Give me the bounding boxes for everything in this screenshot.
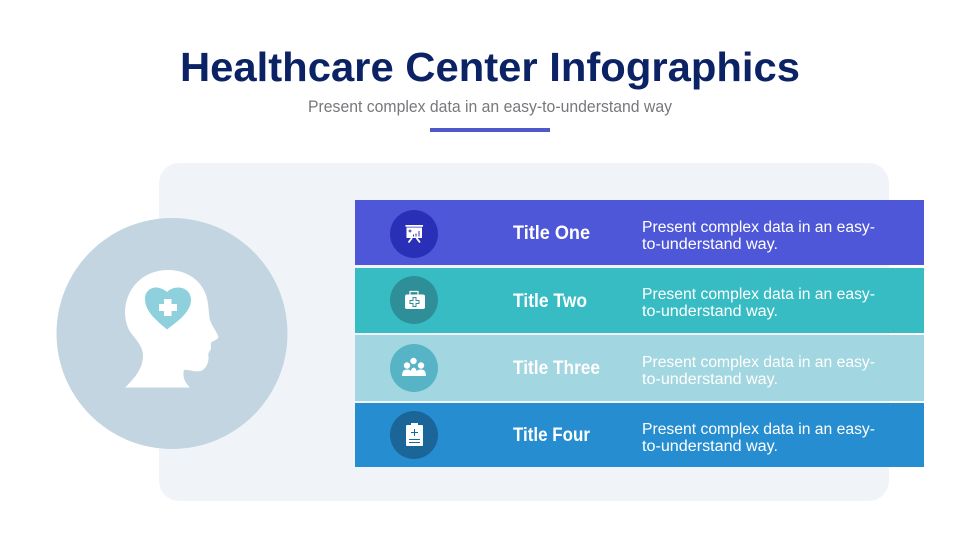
- row 4 description: to-understand way.: [642, 438, 778, 455]
- row 4 band: [355, 403, 924, 467]
- row 3 band: [355, 335, 924, 401]
- row 1 band: [355, 200, 924, 265]
- row 2 description: to-understand way.: [642, 303, 778, 320]
- icon: heart: [145, 287, 191, 330]
- row 3 description: to-understand way.: [642, 371, 778, 388]
- row 1 icon: presentation board: [390, 210, 438, 258]
- row 4 title: Title Four: [513, 425, 591, 446]
- title underline accent: [430, 128, 550, 132]
- row 3 title: Title Three: [513, 358, 600, 379]
- row 1: [355, 200, 924, 265]
- row 4 icon: medical clipboard: [390, 411, 438, 459]
- row 2 description: Present complex data in an easy-: [642, 286, 875, 303]
- row 1 title: Title One: [513, 223, 590, 244]
- row 3 description: Present complex data in an easy-: [642, 354, 875, 371]
- icon: medical cross: [159, 299, 177, 316]
- head illustration: [56, 218, 288, 449]
- row 2 icon: first aid kit: [390, 276, 438, 324]
- row 2 title: Title Two: [513, 291, 587, 312]
- title: Healthcare Center Infographics: [180, 44, 800, 90]
- row 3: [355, 335, 924, 401]
- row 4 description: Present complex data in an easy-: [642, 421, 875, 438]
- head circle: [56, 218, 288, 449]
- row 1 description: Present complex data in an easy-: [642, 219, 875, 236]
- icon: head silhouette: [125, 270, 218, 388]
- subtitle: Present complex data in an easy-to-understand way: [308, 98, 673, 116]
- row 2: [355, 268, 924, 333]
- row 2 band: [355, 268, 924, 333]
- row 3 icon: people group: [390, 344, 438, 392]
- background panel: [159, 163, 889, 501]
- row 4: [355, 403, 924, 467]
- row 1 description: to-understand way.: [642, 236, 778, 253]
